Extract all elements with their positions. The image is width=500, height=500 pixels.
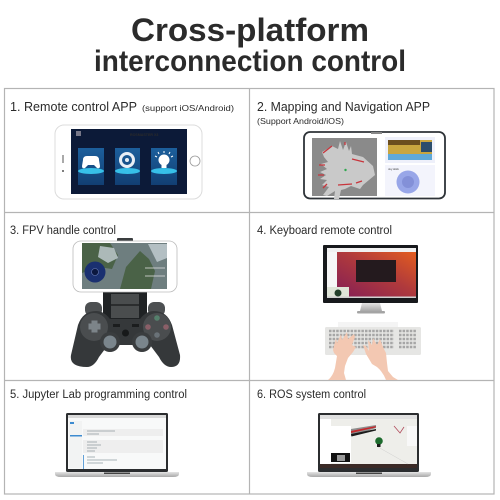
icon: phone on gamepad bbox=[71, 238, 180, 367]
gamepad body bbox=[71, 302, 180, 367]
heading 1: 1. Remote control APP bbox=[10, 99, 137, 114]
camera view bbox=[385, 137, 435, 163]
phone bbox=[73, 241, 177, 292]
card: gear bbox=[115, 148, 140, 185]
heading 5: 5. Jupyter Lab programming control bbox=[10, 389, 187, 401]
panel 3: FPV handle control bbox=[10, 225, 180, 367]
heading 2 bbox=[257, 99, 430, 126]
card: light bulb bbox=[151, 148, 177, 185]
icon: monitor bbox=[323, 245, 418, 314]
panel 5: Jupyter Lab programming control bbox=[10, 389, 187, 477]
panel 6: ROS system control bbox=[257, 389, 431, 477]
icon: white phone with app screen bbox=[55, 125, 202, 199]
panel 1: remote control app bbox=[10, 99, 234, 199]
heading 1: (support iOS/Android) bbox=[142, 103, 234, 113]
joystick panel: Joy stick bbox=[388, 167, 399, 171]
heading 1 bbox=[10, 99, 234, 114]
card: gamepad bbox=[78, 148, 104, 185]
heading 4: 4. Keyboard remote control bbox=[257, 225, 392, 237]
hands bbox=[328, 332, 356, 380]
icon: laptop with RViz bbox=[307, 413, 431, 477]
joystick panel bbox=[385, 165, 435, 196]
heading 2: 2. Mapping and Navigation APP bbox=[257, 99, 430, 114]
panel 2: mapping and navigation app bbox=[257, 99, 445, 199]
panel 4: keyboard remote control bbox=[257, 225, 421, 380]
title: Cross-platform bbox=[131, 12, 369, 48]
heading 6: 6. ROS system control bbox=[257, 389, 366, 401]
clamp bbox=[103, 238, 147, 322]
icon: keyboard with hands bbox=[325, 322, 421, 380]
grid of panels bbox=[4, 88, 494, 494]
heading 2: (Support Android/iOS) bbox=[257, 116, 344, 126]
title: interconnection control bbox=[94, 45, 406, 78]
icon: white phone with app screen: ROSMASTER X3 bbox=[130, 133, 158, 137]
title bbox=[94, 12, 406, 78]
occupancy map bbox=[312, 138, 377, 199]
heading 3: 3. FPV handle control bbox=[10, 225, 116, 237]
terminal window bbox=[356, 260, 396, 282]
icon: black-framed phone with map bbox=[304, 132, 445, 199]
icon: laptop with Jupyter Lab bbox=[55, 413, 179, 477]
